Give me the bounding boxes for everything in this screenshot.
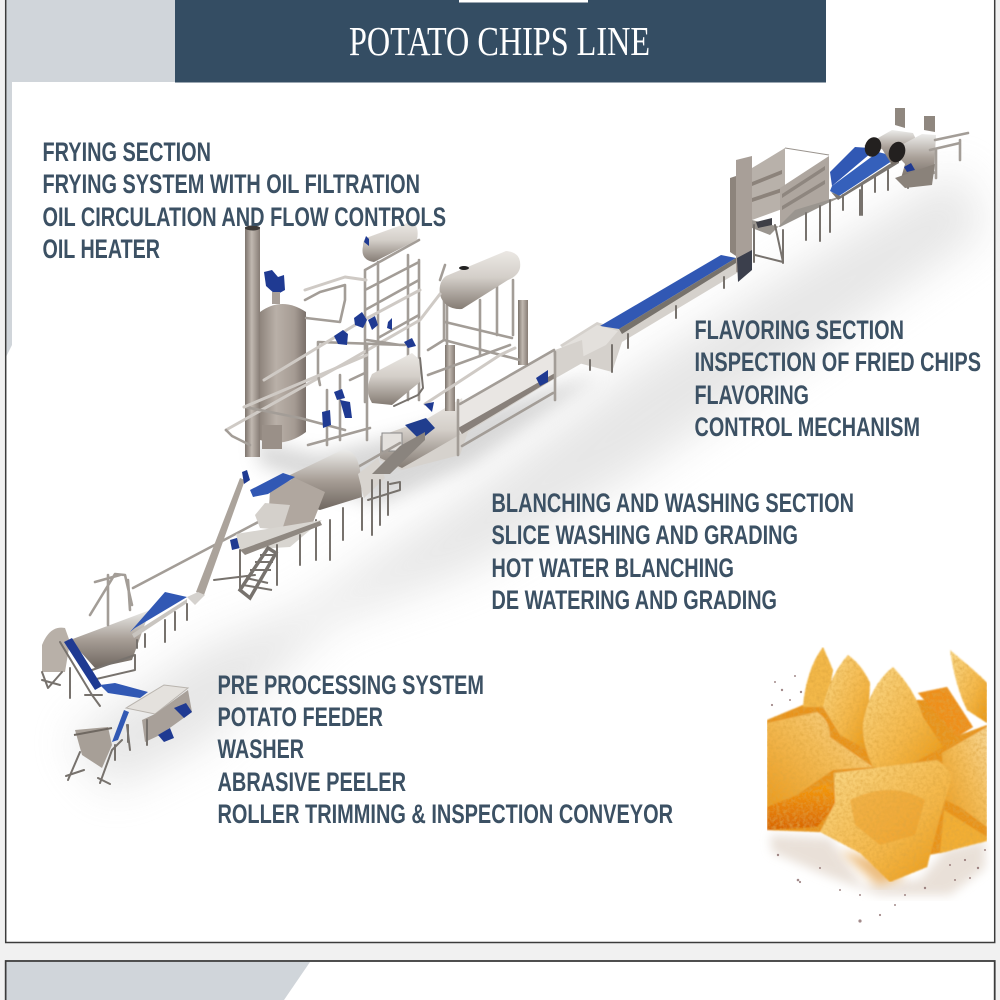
headings and text: pre processing system: ABRASIVE PEELER (218, 767, 406, 797)
inclined auger (196, 470, 255, 595)
headings and text: blanching and washing section: DE WATERING AND GRADING (492, 585, 777, 615)
floor shadow under production line (70, 170, 985, 790)
headings and text: pre processing system: ROLLER TRIMMING & INSPECTION CONVEYOR (218, 799, 673, 829)
headings and text: pre processing system: PRE PROCESSING SYSTEM (218, 670, 484, 700)
machine: blanching and washing section (133, 432, 425, 598)
blue belt conveyor (130, 592, 205, 648)
panel: next slide (6, 961, 995, 1000)
machine: flavoring section (560, 108, 968, 372)
low horizontal tank (368, 353, 423, 406)
title banner: POTATO CHIPS LINE (349, 18, 650, 64)
seasoning blue conveyors (830, 147, 908, 215)
title banner (175, 0, 826, 82)
long feed pipe (133, 443, 400, 588)
headings and text: blanching and washing section (492, 488, 854, 615)
headings and text: flavoring section: FLAVORING SECTION (694, 315, 904, 345)
washer drum (42, 574, 150, 688)
headings and text: blanching and washing section: HOT WATER BLANCHING (492, 553, 734, 583)
photo: potato chips (767, 647, 987, 923)
upper horizontal tank and frame (362, 222, 419, 402)
headings and text: frying section: OIL HEATER (42, 234, 160, 264)
headings and text: frying section: FRYING SECTION (42, 137, 211, 167)
elevator and dryer hood (730, 148, 860, 282)
large horizontal tank and frame (440, 251, 528, 411)
headings and text: flavoring section: CONTROL MECHANISM (694, 412, 920, 442)
platform (236, 520, 330, 590)
small blue feeder (112, 710, 129, 742)
headings and text: frying section: FRYING SYSTEM WITH OIL FILTRATION (42, 169, 420, 199)
headings and text: pre processing system: WASHER (218, 734, 304, 764)
oil tank with motor (260, 270, 306, 449)
pipework (226, 277, 520, 445)
seasoning specks (771, 675, 986, 923)
headings and text: blanching and washing section: BLANCHING AND WASHING SECTION (492, 488, 854, 518)
chimney (245, 226, 260, 457)
inclined blue belt (60, 638, 102, 706)
low blue belt (100, 683, 148, 698)
headings and text: frying section: OIL CIRCULATION AND FLOW CONTROLS (42, 202, 446, 232)
headings and text: blanching and washing section: SLICE WASHING AND GRADING (492, 520, 798, 550)
headings and text: pre processing system (218, 670, 673, 829)
upper blue conveyor (250, 473, 295, 497)
headings and text: pre processing system: POTATO FEEDER (218, 702, 383, 732)
inspection conveyor, long blue belt (560, 255, 745, 372)
blue valves and pumps (322, 312, 434, 428)
peeler (126, 685, 192, 745)
headings and text: frying section (42, 137, 446, 264)
machine: fryer and oil system (226, 222, 584, 470)
fryer (380, 340, 584, 470)
headings and text: flavoring section: FLAVORING (694, 380, 809, 410)
stairs (240, 548, 276, 598)
seasoning drums and dosing towers (862, 108, 968, 188)
feed hopper (66, 725, 130, 784)
headings and text: flavoring section (694, 315, 981, 442)
rotary drum blancher (255, 432, 425, 560)
machine: pre-processing system (42, 574, 205, 784)
